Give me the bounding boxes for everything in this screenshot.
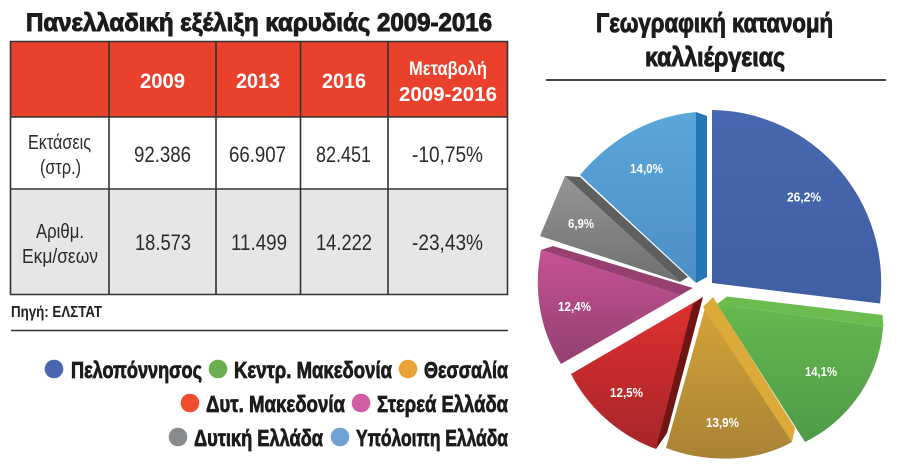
slice: Κεντρ. Μακεδονία 14,1%: 14,1%	[805, 365, 837, 379]
slice: Κεντρ. Μακεδονία 14,1%	[717, 296, 884, 442]
legend: Δυτική Ελλάδα	[169, 425, 323, 451]
table row: Αριθμ. Εκμ/σεων: 11.499	[231, 230, 287, 255]
slice: Δυτική Ελλάδα 6,9%: 6,9%	[568, 217, 594, 231]
table row: Αριθμ. Εκμ/σεων	[10, 189, 508, 294]
legend: Πελοπόννησος: Πελοπόννησος	[71, 357, 202, 383]
source note: Πηγή: ΕΛΣΤΑΤ	[11, 304, 102, 321]
table header row: Μεταβολή	[409, 59, 487, 80]
table header row: 2009	[140, 70, 185, 93]
table header row: 2016	[322, 70, 366, 93]
title: pie chart heading: καλλιέργειας	[645, 42, 785, 72]
table row: Εκτάσεις	[10, 117, 508, 189]
slice: Θεσσαλία 13,9%	[666, 297, 795, 459]
table row: Εκτάσεις: 66.907	[229, 142, 286, 167]
pie chart	[538, 110, 884, 459]
table row: Αριθμ. Εκμ/σεων: 14.222	[316, 230, 372, 255]
legend: Δυτική Ελλάδα: Δυτική Ελλάδα	[194, 425, 323, 451]
legend: Θεσσαλία	[399, 357, 508, 383]
legend: Στερεά Ελλάδα: Στερεά Ελλάδα	[377, 391, 508, 417]
legend: Κεντρ. Μακεδονία: Κεντρ. Μακεδονία	[234, 357, 392, 383]
title: pie chart heading	[596, 8, 833, 72]
legend: Στερεά Ελλάδα	[352, 391, 508, 417]
slice: Δυτ. Μακεδονία 12,5%	[571, 297, 703, 449]
slice: Υπόλοιπη Ελλάδα 14,0%: 14,0%	[630, 162, 663, 176]
legend: Υπόλοιπη Ελλάδα: Υπόλοιπη Ελλάδα	[356, 425, 508, 451]
title: table heading: Πανελλαδική εξέλιξη καρυδιάς 2009-2016	[26, 9, 492, 37]
slice: Υπόλοιπη Ελλάδα 14,0%	[580, 112, 707, 283]
table row: Αριθμ. Εκμ/σεων: Αριθμ.	[36, 221, 84, 243]
slice: Πελοπόννησος 26,2%	[712, 110, 881, 304]
table row: Αριθμ. Εκμ/σεων: -23,43%	[412, 230, 483, 255]
table row: Αριθμ. Εκμ/σεων: Εκμ/σεων	[22, 246, 98, 268]
slice: Θεσσαλία 13,9%: 13,9%	[706, 416, 739, 430]
table row: Εκτάσεις: Εκτάσεις	[28, 132, 91, 154]
legend: Δυτ. Μακεδονία: Δυτ. Μακεδονία	[206, 391, 345, 417]
slice: Δυτική Ελλάδα 6,9%	[540, 176, 688, 282]
legend: Πελοπόννησος	[45, 357, 202, 383]
slice: Στερεά Ελλάδα 12,4%: 12,4%	[558, 300, 591, 314]
table row: Εκτάσεις: 82.451	[316, 142, 371, 167]
legend	[45, 357, 508, 451]
slice: Στερεά Ελλάδα 12,4%	[538, 246, 693, 364]
data table	[10, 41, 508, 295]
table row: Εκτάσεις: -10,75%	[412, 142, 483, 167]
slice: Πελοπόννησος 26,2%: 26,2%	[787, 190, 821, 204]
table header row: 2013	[236, 70, 280, 93]
title: pie chart heading: Γεωγραφική κατανομή	[596, 8, 833, 38]
table row: Εκτάσεις: (στρ.)	[40, 157, 81, 179]
legend: Υπόλοιπη Ελλάδα	[331, 425, 508, 451]
table header row: 2009-2016	[399, 84, 497, 106]
table header row	[10, 41, 508, 117]
table row: Αριθμ. Εκμ/σεων: 18.573	[135, 230, 191, 255]
legend: Θεσσαλία: Θεσσαλία	[424, 357, 508, 383]
table row: Εκτάσεις: 92.386	[134, 142, 191, 167]
slice: Δυτ. Μακεδονία 12,5%: 12,5%	[610, 386, 643, 400]
